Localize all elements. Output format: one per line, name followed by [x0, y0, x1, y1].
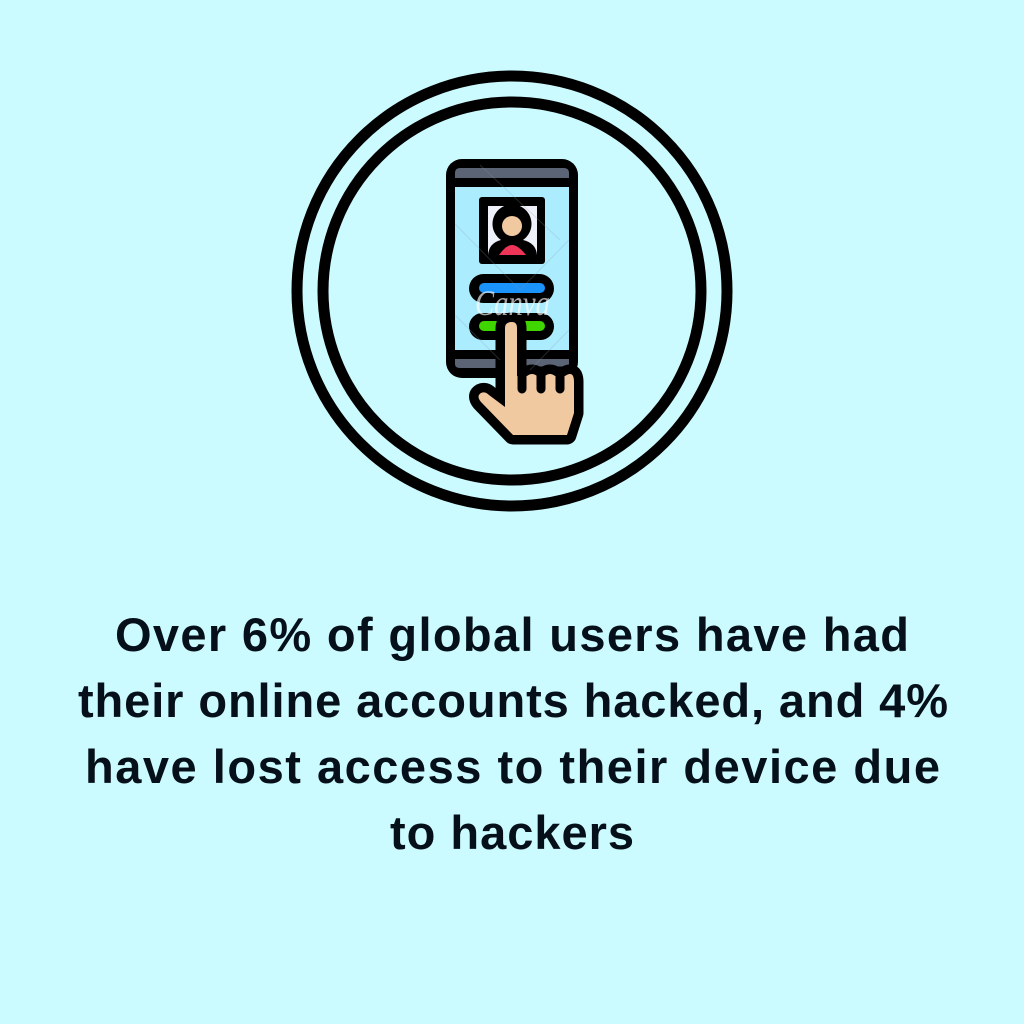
- double ring frame: [297, 76, 727, 506]
- watermark: Canva: [475, 283, 550, 323]
- pointing hand: [478, 322, 574, 435]
- blue pill button: [469, 274, 554, 303]
- statistic text: Over 6% of global users have had: [115, 608, 909, 661]
- profile photo: [479, 197, 545, 264]
- statistic text: [78, 608, 948, 859]
- icon: phone with profile and pointing hand: [446, 159, 578, 435]
- statistic text: have lost access to their device due: [85, 740, 940, 793]
- statistic text: their online accounts hacked, and 4%: [78, 674, 948, 727]
- watermark: [455, 165, 569, 370]
- statistic text: to hackers: [390, 806, 634, 859]
- green pill button: [469, 313, 554, 340]
- phone body: [446, 159, 578, 378]
